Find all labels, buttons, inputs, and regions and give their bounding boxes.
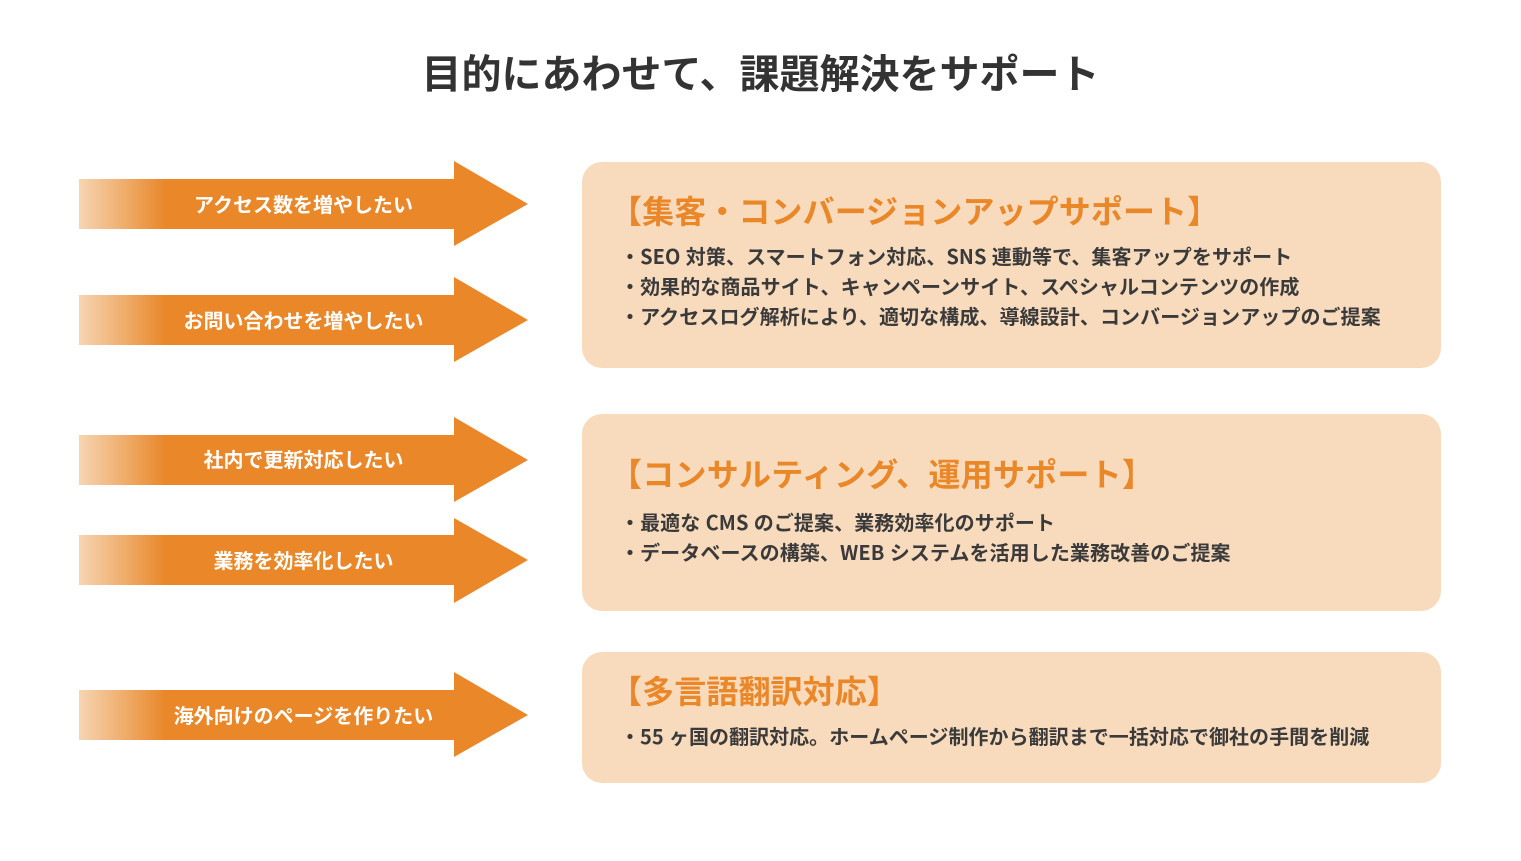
arrow: 海外向けのページを作りたい: 海外向けのページを作りたい bbox=[174, 700, 433, 729]
arrow: 業務を効率化したい bbox=[79, 518, 528, 603]
panel heading: 【多言語翻訳対応】 bbox=[610, 667, 899, 713]
bullet line 2: ・データベースの構築、WEB システムを活用した業務改善のご提案 bbox=[620, 537, 1231, 566]
panel heading: 【コンサルティング、運用サポート】 bbox=[610, 450, 1154, 496]
arrow: アクセス数を増やしたい: アクセス数を増やしたい bbox=[194, 189, 413, 218]
arrow: アクセス数を増やしたい bbox=[79, 161, 528, 246]
bullet line 2: ・効果的な商品サイト、キャンペーンサイト、スペシャルコンテンツの作成 bbox=[620, 271, 1299, 300]
bullet line 3: ・アクセスログ解析により、適切な構成、導線設計、コンバージョンアップのご提案 bbox=[620, 301, 1381, 330]
arrow: 社内で更新対応したい bbox=[79, 417, 528, 502]
panel: コンサルティング、運用サポート bbox=[582, 414, 1441, 611]
panel: 多言語翻訳対応 bbox=[582, 652, 1441, 783]
bullet line 1: ・SEO 対策、スマートフォン対応、SNS 連動等で、集客アップをサポート bbox=[620, 241, 1292, 270]
arrow: 海外向けのページを作りたい bbox=[79, 672, 528, 757]
arrow: 業務を効率化したい: 業務を効率化したい bbox=[214, 545, 394, 574]
panel: 集客・コンバージョンアップサポート bbox=[582, 162, 1441, 368]
panel heading: 【集客・コンバージョンアップサポート】 bbox=[610, 187, 1219, 233]
bullet line 1: ・最適な CMS のご提案、業務効率化のサポート bbox=[620, 507, 1055, 536]
bullet line 1: ・55 ヶ国の翻訳対応。ホームページ制作から翻訳まで一括対応で御社の手間を削減 bbox=[620, 721, 1369, 750]
arrow: 社内で更新対応したい: 社内で更新対応したい bbox=[204, 444, 404, 473]
arrow: お問い合わせを増やしたい bbox=[79, 277, 528, 362]
title: 目的にあわせて、課題解決をサポート bbox=[422, 42, 1100, 100]
arrow: お問い合わせを増やしたい: お問い合わせを増やしたい bbox=[184, 305, 424, 334]
